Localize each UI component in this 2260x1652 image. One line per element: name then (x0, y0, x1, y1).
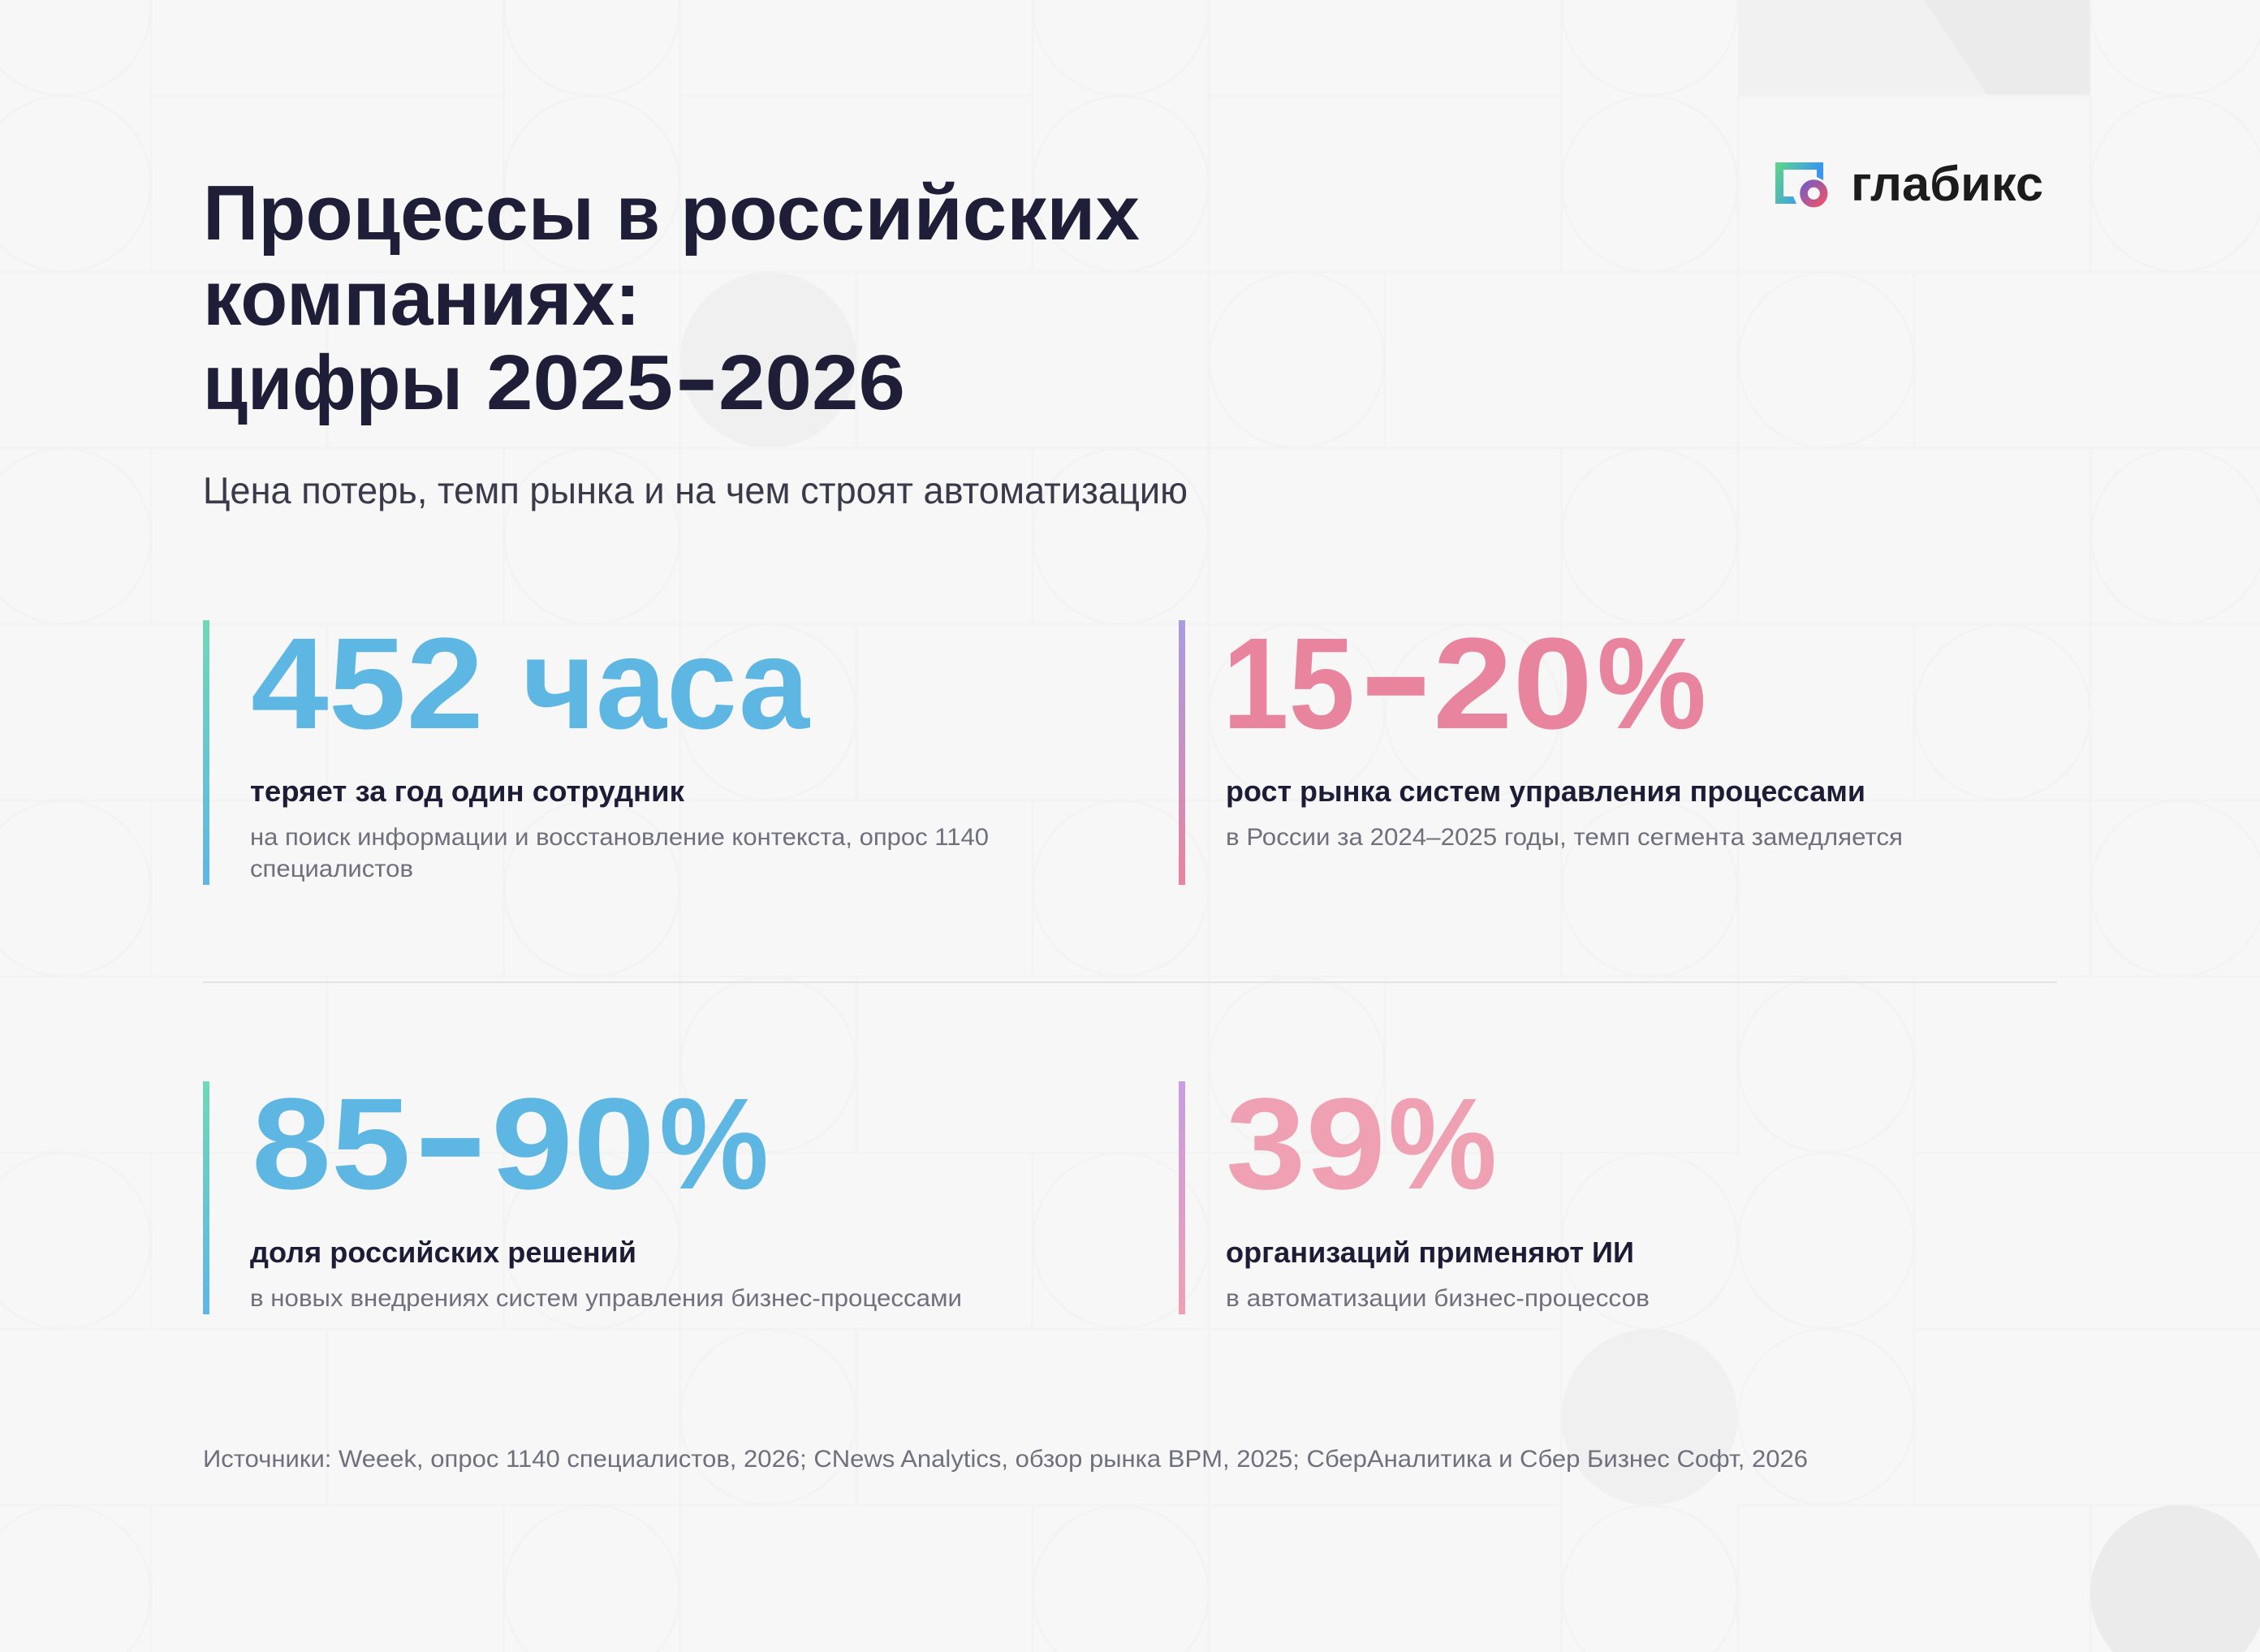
big number: % (659, 1071, 769, 1216)
big number: % (1597, 610, 1706, 756)
stat description (250, 824, 989, 882)
stat description: в России за 2024–2025 годы, темп сегмента замедляется (1226, 824, 1903, 851)
stat description: на поиск информации и восстановление контекста, опрос 1140 (250, 824, 989, 851)
accent bar (1179, 620, 1185, 885)
logo wordmark: глабикс (1851, 157, 2043, 211)
big number: 452 (251, 610, 484, 756)
big number: – (418, 1029, 483, 1237)
divider (203, 981, 2057, 983)
big number: 90 (491, 1071, 655, 1216)
stat description: в новых внедрениях систем управления бизнес-процессами (250, 1285, 962, 1312)
title: цифры (203, 339, 463, 426)
big number: 85 (252, 1071, 411, 1216)
title: в (616, 170, 660, 257)
big number: 15 (1223, 610, 1355, 756)
logo: глабикс (1775, 157, 2043, 211)
subtitle: Цена потерь, темп рынка и на чем строят автоматизацию (203, 469, 1188, 511)
title: российских (680, 170, 1140, 257)
stat label: теряет за год один сотрудник (250, 774, 685, 808)
stat label: доля российских решений (250, 1236, 636, 1269)
accent bar (203, 1081, 209, 1314)
big number: % (1388, 1071, 1497, 1216)
stat label: рост рынка систем управления процессами (1226, 774, 1865, 808)
title: Процессы (203, 170, 594, 257)
title: 2026 (718, 339, 905, 426)
panel: stat 39% (1179, 1071, 1650, 1314)
big number: 20 (1433, 610, 1593, 756)
accent bar (203, 620, 209, 885)
panel: stat 452 часа (203, 610, 989, 885)
title: 2025 (486, 339, 673, 426)
big number: 39 (1226, 1071, 1386, 1216)
title: компаниях: (203, 255, 640, 342)
big number: часа (522, 610, 810, 756)
stat label: организаций применяют ИИ (1226, 1236, 1634, 1269)
big number: – (1364, 567, 1428, 776)
big number (1226, 1071, 1497, 1216)
big number (252, 1029, 769, 1237)
stat description: специалистов (250, 856, 413, 882)
title (203, 170, 1140, 436)
panel: stat 85–90% (203, 1029, 962, 1314)
icon: logo mark (1775, 162, 1824, 204)
panel: stat 15–20% (1179, 567, 1903, 885)
big number (1223, 567, 1706, 776)
big number (251, 610, 810, 756)
title: – (678, 317, 715, 436)
accent bar (1179, 1081, 1185, 1314)
stat description: в автоматизации бизнес-процессов (1226, 1285, 1650, 1312)
sources footnote: Источники: Weeek, опрос 1140 специалистов, 2026; CNews Analytics, обзор рынка BPM, 2025; СберАналитика и Сбер Бизнес Софт, 2026 (203, 1446, 1808, 1473)
